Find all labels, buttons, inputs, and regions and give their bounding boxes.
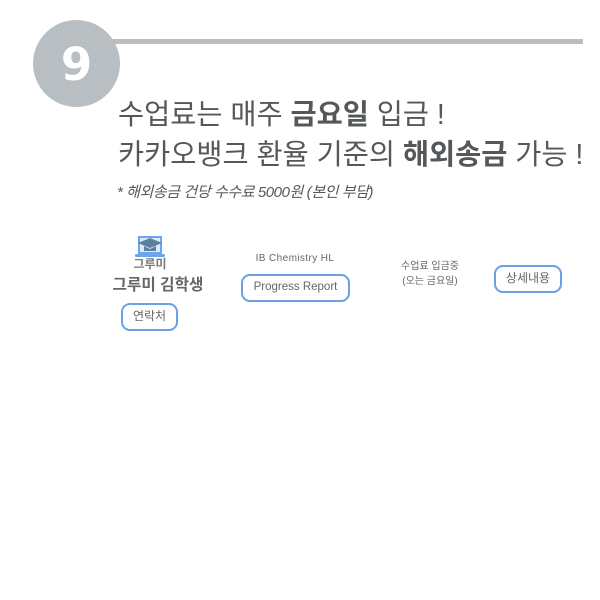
- contact button: [121, 303, 178, 331]
- payment status: 수업료 입금중: [401, 261, 459, 272]
- payment status: [401, 260, 459, 287]
- student name: 그루미 김학생: [113, 277, 203, 294]
- number badge: [33, 20, 120, 107]
- course label: IB Chemistry HL: [256, 253, 334, 264]
- brand label: 그루미: [133, 257, 167, 271]
- fee note: * 해외송금 건당 수수료 5000원 (본인 부담): [117, 184, 373, 201]
- progress report button: [241, 274, 350, 302]
- heading line 1: 수업료는 매주 금요일 입금 !: [118, 99, 445, 131]
- number badge: 9: [61, 38, 92, 91]
- details button: 상세내용: [506, 271, 550, 285]
- contact button: 연락처: [133, 309, 166, 323]
- payment status: (오는 금요일): [402, 276, 458, 287]
- header line: [100, 39, 583, 44]
- details button: [494, 265, 562, 293]
- icon: graduation cap laptop: [135, 236, 165, 257]
- progress report button: Progress Report: [254, 281, 337, 293]
- heading line 2: 카카오뱅크 환율 기준의 해외송금 가능 !: [118, 139, 583, 171]
